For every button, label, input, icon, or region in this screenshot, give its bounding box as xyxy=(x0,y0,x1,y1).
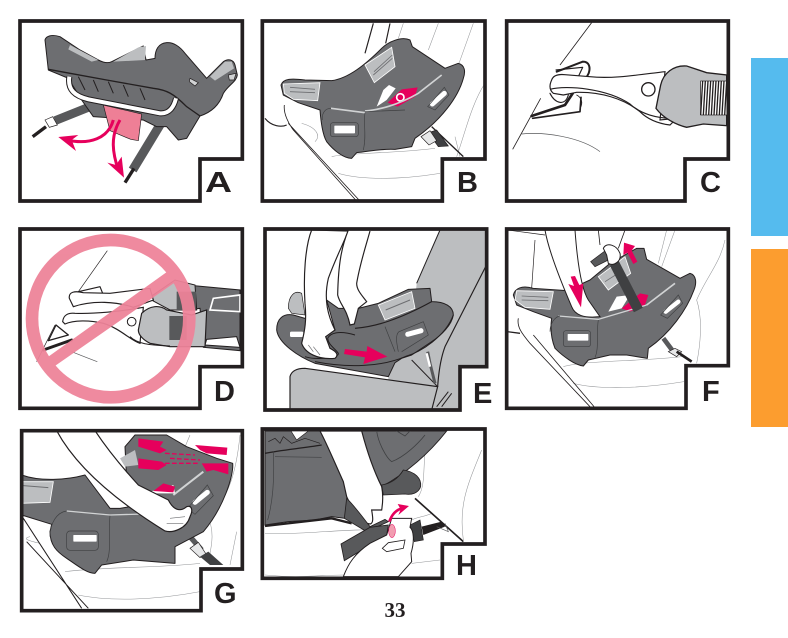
label C: C xyxy=(700,167,721,199)
frame B xyxy=(262,21,485,201)
seat front xyxy=(362,431,447,487)
label H: H xyxy=(456,550,477,582)
vehicle seat back xyxy=(388,230,487,410)
frame G xyxy=(22,431,242,611)
panel G: check seat movement xyxy=(22,431,242,611)
seat body xyxy=(265,431,352,525)
frame H xyxy=(262,429,485,578)
panel A: detach base lock-off and belts xyxy=(20,21,242,201)
upper and lower latch straps xyxy=(196,285,240,352)
forearm xyxy=(320,431,383,524)
tab: blue xyxy=(751,58,788,236)
pink arrows xyxy=(568,276,583,307)
seat xyxy=(281,39,465,158)
panel D: incorrect latch hook with prohibition sign xyxy=(20,229,242,408)
strap right xyxy=(133,118,164,170)
pink arrow xyxy=(344,346,387,364)
strap pulled xyxy=(614,263,638,310)
label A: A xyxy=(205,167,232,199)
buckle xyxy=(410,520,423,542)
panel H: tighten belt xyxy=(262,429,485,578)
pink curved arrow xyxy=(389,509,401,522)
label E: E xyxy=(473,378,492,410)
seat base xyxy=(45,35,237,140)
pink arrows xyxy=(67,120,113,142)
panel C: correct latch hook xyxy=(507,21,728,201)
seat base xyxy=(288,292,305,315)
tab: orange xyxy=(751,249,788,427)
panel F: push down and pull strap xyxy=(507,229,728,408)
page number: 33 xyxy=(384,598,406,622)
vehicle seat bottom xyxy=(290,368,438,410)
arm and hand xyxy=(57,431,192,532)
label G: G xyxy=(214,578,237,610)
prohibition sign xyxy=(32,240,189,397)
hands xyxy=(302,230,348,359)
frame D xyxy=(20,229,242,408)
pink movement arrows xyxy=(138,438,167,453)
grey strap tab xyxy=(656,66,727,127)
panel B: base on vehicle seat xyxy=(262,21,485,201)
frame E xyxy=(265,229,487,410)
arm and hand xyxy=(545,230,600,317)
pink lock-off block xyxy=(103,105,142,141)
label F: F xyxy=(702,376,720,408)
white bar xyxy=(69,77,176,113)
strap left xyxy=(55,107,90,121)
label D: D xyxy=(214,376,235,408)
seat xyxy=(22,435,233,573)
lower hand xyxy=(343,518,413,577)
panel E: press seat into vehicle seat xyxy=(265,229,487,410)
label B: B xyxy=(457,167,478,199)
belt and buckle xyxy=(432,127,463,157)
frame C xyxy=(507,21,728,201)
frame A xyxy=(20,21,242,201)
seat xyxy=(513,248,696,366)
frame F xyxy=(507,229,728,408)
latch connector xyxy=(557,62,590,78)
strap xyxy=(382,470,421,495)
